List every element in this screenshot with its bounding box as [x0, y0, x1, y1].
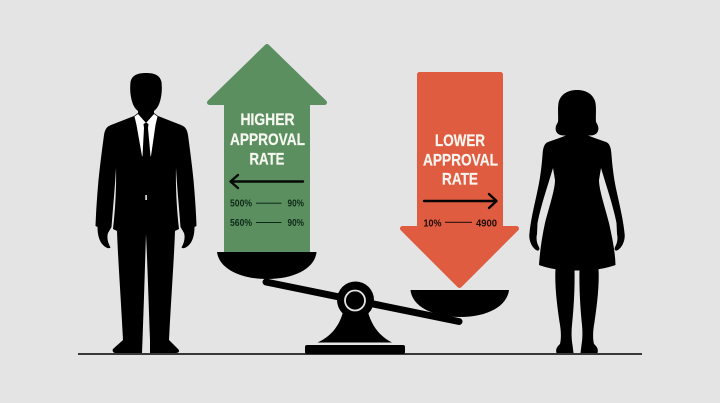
heading: lower approval rate: LOWER: [435, 131, 485, 150]
left pan: [217, 252, 316, 279]
heading: higher approval rate: HIGHER: [240, 110, 294, 129]
stat rows: 90%: [288, 218, 304, 229]
balance scale: [217, 252, 509, 354]
heading: lower approval rate: RATE: [442, 170, 478, 188]
scale base: [305, 345, 405, 354]
right pan: [410, 290, 509, 317]
stat row: 10%: [424, 218, 442, 230]
arrow pointing right: [424, 194, 496, 208]
heading: lower approval rate: [423, 131, 498, 188]
green up arrow: higher approval rate: [210, 46, 324, 253]
heading: higher approval rate: RATE: [250, 150, 284, 168]
scale stand: [318, 312, 392, 342]
stat row: 4900: [476, 218, 497, 230]
stat rows: 500%: [230, 198, 252, 210]
stat rows: [230, 198, 304, 229]
stat rows: 90%: [288, 198, 304, 210]
scale pivot: [337, 282, 374, 318]
heading: higher approval rate: [230, 110, 305, 168]
heading: higher approval rate: APPROVAL: [230, 130, 305, 149]
icon: woman silhouette: [529, 90, 625, 353]
heading: lower approval rate: APPROVAL: [423, 150, 498, 170]
scale beam: [266, 282, 459, 322]
stat rows: 560%: [230, 218, 252, 229]
icon: man silhouette: [96, 73, 196, 353]
arrow pointing left: [230, 175, 303, 188]
stat row: [424, 218, 497, 230]
shirt collar: [134, 114, 158, 162]
red down arrow: lower approval rate: [402, 74, 516, 286]
